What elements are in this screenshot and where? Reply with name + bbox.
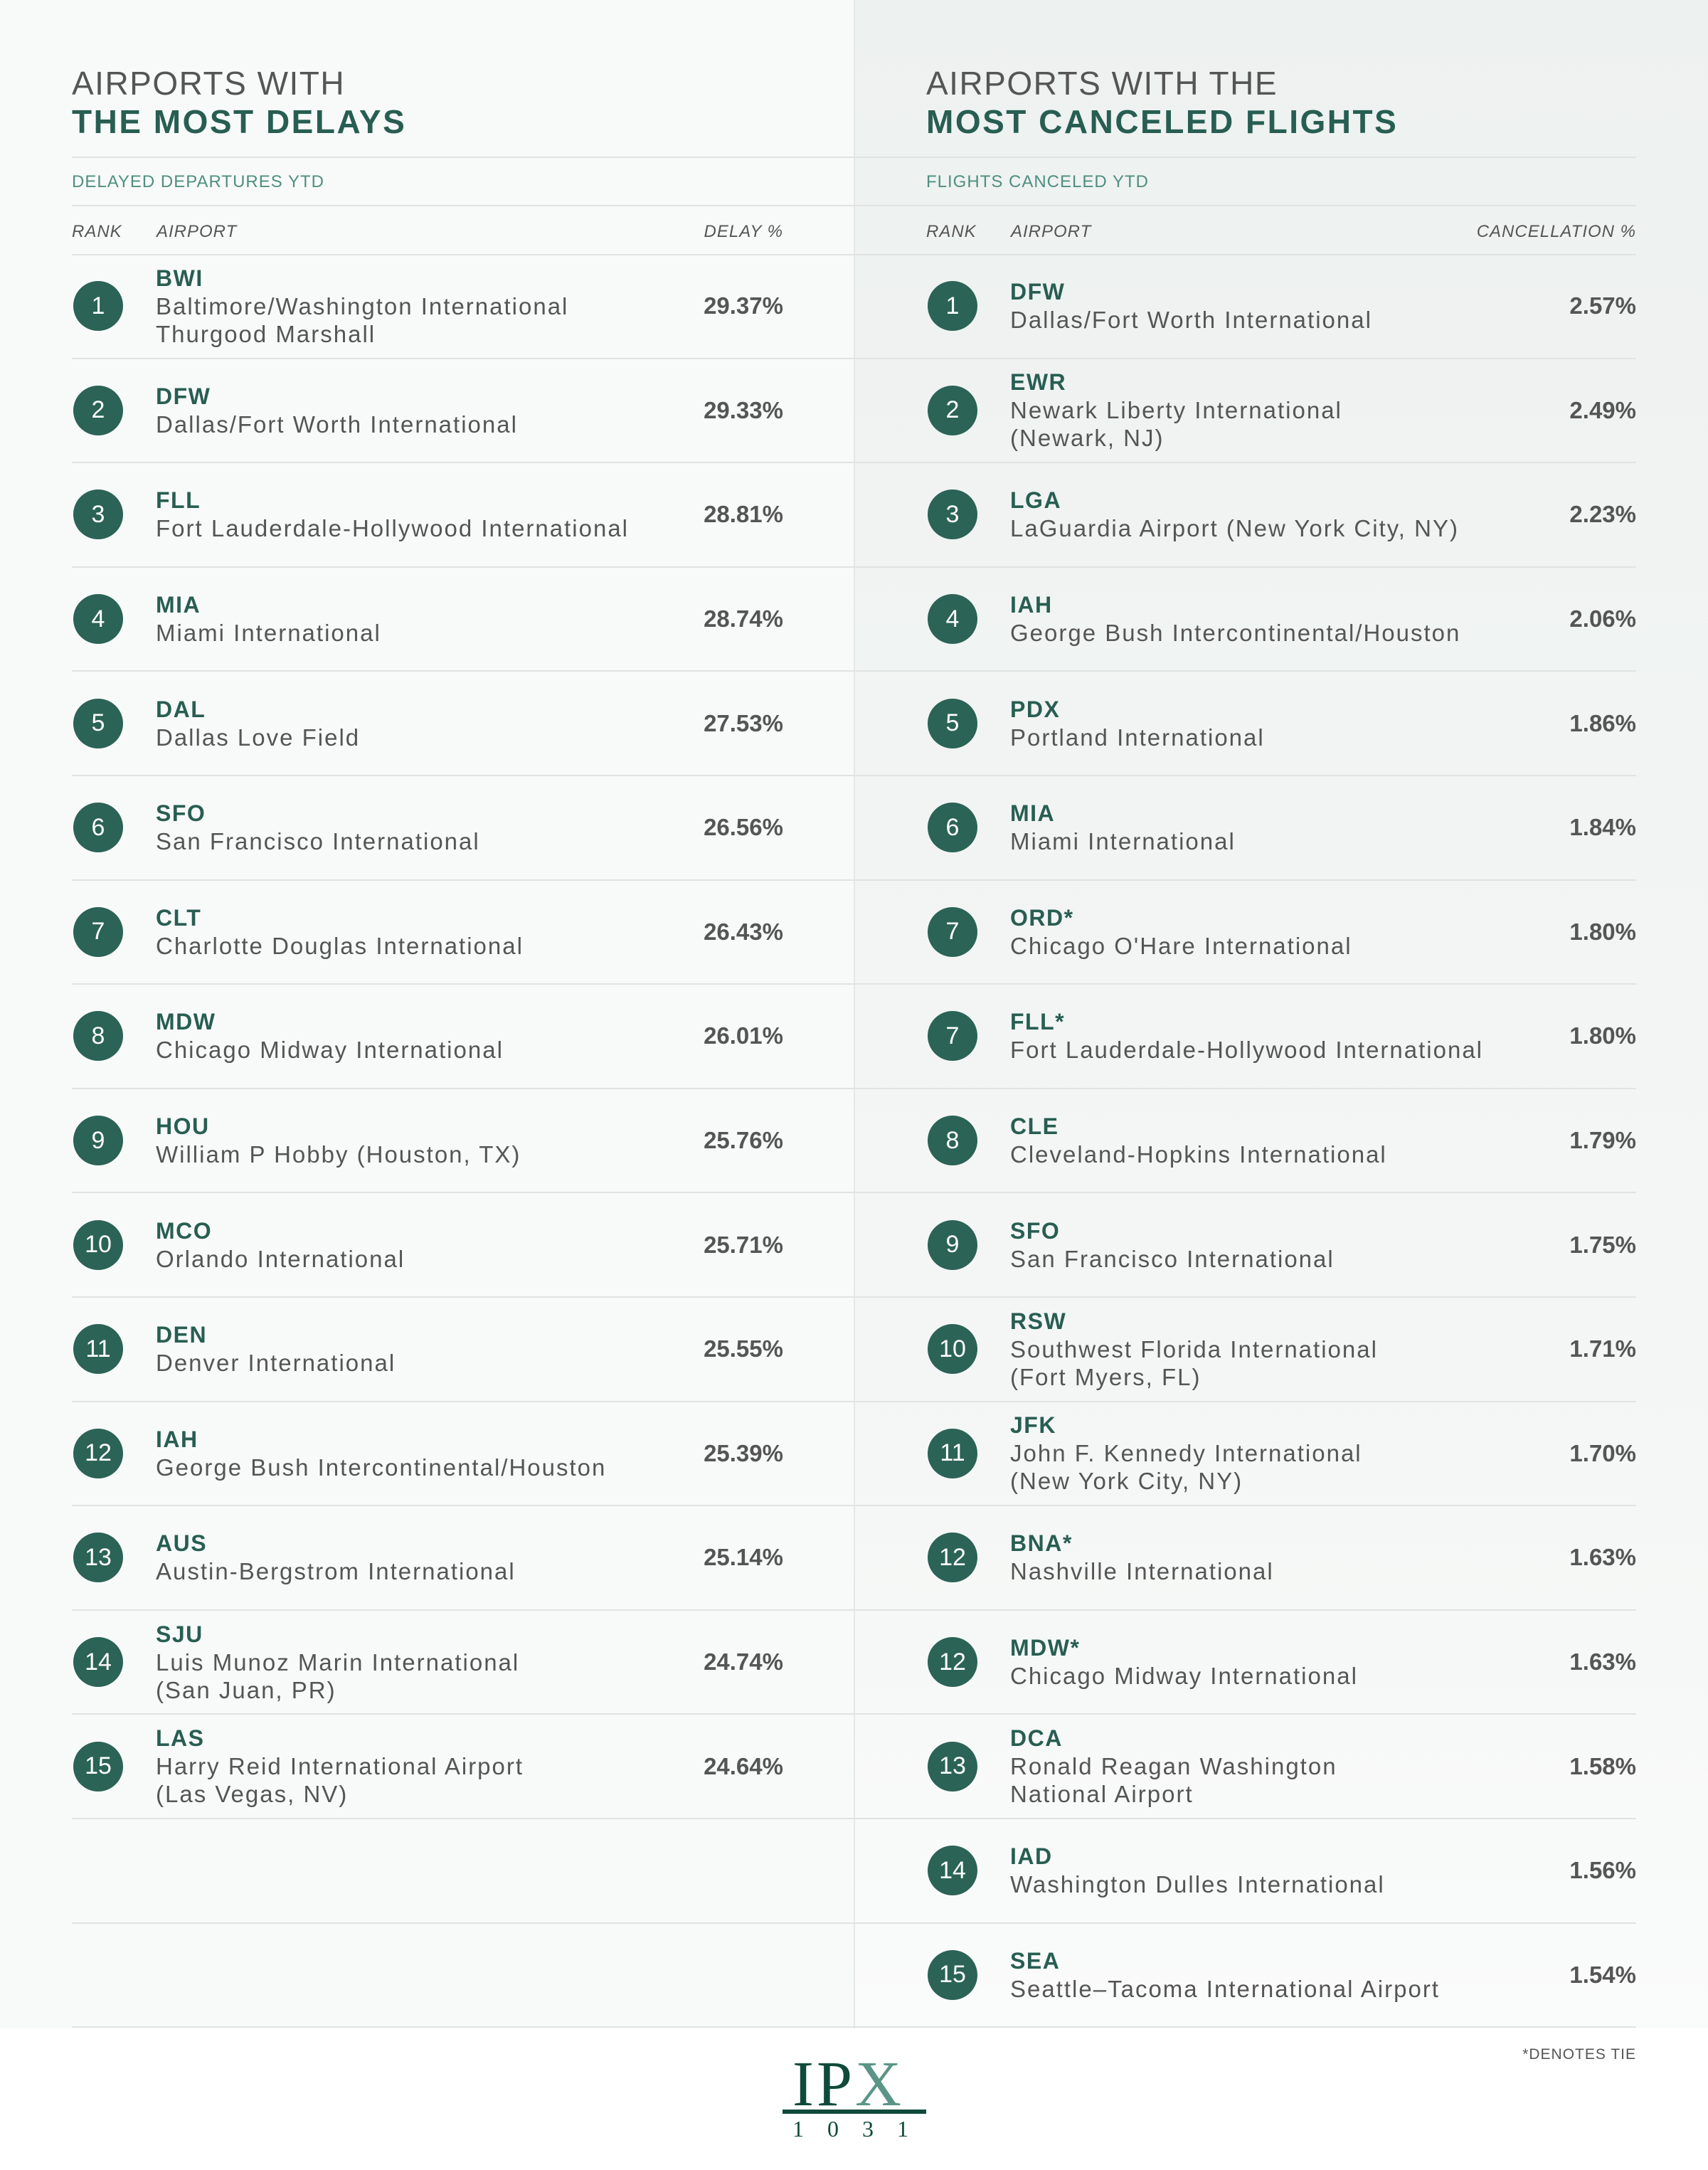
table: delays: 27.53% — [704, 710, 783, 736]
table: delays: 29.33% — [704, 397, 783, 423]
table: cancellations: 1.71% — [1569, 1335, 1636, 1362]
column headers: DELAY % — [704, 222, 783, 241]
table: delays: MDW — [156, 1009, 216, 1034]
table: delays: (San Juan, PR) — [156, 1677, 336, 1703]
table: delays: LAS — [156, 1725, 205, 1751]
table: delays: 28.74% — [704, 605, 783, 632]
table: delays: 26.56% — [704, 814, 783, 840]
table: delays: 1 — [92, 292, 105, 319]
table: delays: 12 — [85, 1439, 112, 1466]
table: cancellations: Nashville International — [1010, 1558, 1274, 1584]
table: cancellations: Miami International — [1010, 828, 1236, 854]
table: delays: DAL — [156, 697, 206, 722]
table: cancellations: 1.58% — [1569, 1753, 1636, 1779]
table: delays: 28.81% — [704, 501, 783, 527]
table: delays: 25.14% — [704, 1544, 783, 1570]
subtitle: DELAYED DEPARTURES YTD — [72, 172, 324, 191]
table: cancellations: Fort Lauderdale-Hollywood International — [1010, 1037, 1483, 1063]
table: delays: (Las Vegas, NV) — [156, 1781, 348, 1807]
table: cancellations: JFK — [1010, 1412, 1056, 1438]
table: delays: Miami International — [156, 620, 381, 646]
table: delays: 25.71% — [704, 1232, 783, 1258]
table: cancellations: 12 — [939, 1544, 966, 1571]
table: cancellations: National Airport — [1010, 1781, 1194, 1807]
table: delays: Dallas/Fort Worth International — [156, 411, 518, 438]
table: cancellations: IAD — [1010, 1843, 1053, 1869]
table: cancellations: IAH — [1010, 592, 1053, 618]
table: delays: 15 — [85, 1752, 112, 1779]
panel: most canceled — [855, 65, 1636, 2028]
table: cancellations: 1.70% — [1569, 1440, 1636, 1466]
column headers: CANCELLATION % — [1477, 222, 1636, 241]
table: delays: 4 — [92, 605, 105, 633]
table: cancellations: 1.75% — [1569, 1232, 1636, 1258]
table: cancellations: 1 — [946, 292, 959, 319]
table: cancellations: (Newark, NJ) — [1010, 425, 1165, 451]
table: cancellations: 1.63% — [1569, 1544, 1636, 1570]
subtitle: FLIGHTS CANCELED YTD — [926, 172, 1149, 191]
table: cancellations: Seattle–Tacoma International Airport — [1010, 1976, 1440, 2002]
table: delays: San Francisco International — [156, 828, 480, 854]
table: cancellations: Southwest Florida International — [1010, 1336, 1378, 1362]
table: cancellations: 6 — [946, 814, 959, 841]
table: cancellations: 7 — [946, 1022, 959, 1049]
table: delays: IAH — [156, 1427, 198, 1452]
table: cancellations: 1.56% — [1569, 1857, 1636, 1883]
table: delays: 29.37% — [704, 292, 783, 319]
table: delays: Baltimore/Washington International — [156, 293, 568, 319]
table: cancellations: Portland International — [1010, 724, 1265, 751]
table: delays: 14 — [85, 1648, 112, 1676]
table: cancellations: MDW* — [1010, 1635, 1080, 1661]
table: cancellations: DFW — [1010, 279, 1065, 305]
table: delays: Orlando International — [156, 1246, 405, 1272]
table: cancellations: 5 — [946, 709, 959, 736]
column headers: AIRPORT — [1011, 222, 1091, 241]
table: delays: CLT — [156, 905, 201, 931]
table: cancellations: CLE — [1010, 1113, 1059, 1139]
table: delays: 13 — [85, 1544, 112, 1571]
table: cancellations: Chicago O'Hare International — [1010, 933, 1352, 959]
table: delays: Harry Reid International Airport — [156, 1753, 524, 1779]
table: delays: 9 — [92, 1127, 105, 1154]
table: cancellations: RSW — [1010, 1308, 1066, 1334]
table: delays: SJU — [156, 1621, 203, 1647]
table: delays: 26.01% — [704, 1022, 783, 1049]
table: cancellations: Ronald Reagan Washington — [1010, 1753, 1337, 1779]
title: delays: AIRPORTS WITH — [72, 65, 345, 102]
table: delays: MIA — [156, 592, 201, 618]
table: delays: BWI — [156, 265, 203, 291]
table: delays: 5 — [92, 709, 105, 736]
table: cancellations: John F. Kennedy International — [1010, 1440, 1362, 1466]
logo: IPX 1031: IPX — [792, 2049, 904, 2119]
title: delays — [72, 65, 406, 140]
table: delays: 2 — [92, 396, 105, 423]
table: delays: 10 — [85, 1231, 112, 1258]
table: cancellations — [855, 279, 1636, 2028]
table: cancellations: 2.49% — [1569, 397, 1636, 423]
table: cancellations: 2.23% — [1569, 501, 1636, 527]
table: delays: Dallas Love Field — [156, 724, 360, 751]
table: cancellations: 12 — [939, 1648, 966, 1676]
table: cancellations: SEA — [1010, 1948, 1060, 1974]
table: delays: Thurgood Marshall — [156, 321, 376, 347]
table: cancellations: DCA — [1010, 1725, 1063, 1751]
column headers — [72, 222, 783, 241]
table: cancellations: Washington Dulles International — [1010, 1871, 1385, 1898]
table: delays: Denver International — [156, 1350, 396, 1376]
table: cancellations: Cleveland-Hopkins International — [1010, 1141, 1387, 1168]
table: delays: Fort Lauderdale-Hollywood International — [156, 515, 629, 541]
table: cancellations: 4 — [946, 605, 959, 633]
logo: IPX 1031: 1031 — [792, 2116, 932, 2142]
title: delays: THE MOST DELAYS — [72, 103, 406, 140]
table: delays: Chicago Midway International — [156, 1037, 504, 1063]
table: cancellations: 3 — [946, 501, 959, 528]
table: cancellations: 1.63% — [1569, 1648, 1636, 1675]
table: cancellations: PDX — [1010, 697, 1060, 722]
table: cancellations: SFO — [1010, 1218, 1060, 1244]
table: cancellations: 15 — [939, 1961, 966, 1988]
table: cancellations: LGA — [1010, 487, 1061, 513]
table: delays: 26.43% — [704, 919, 783, 945]
table: cancellations: 10 — [939, 1335, 966, 1362]
table: cancellations: Dallas/Fort Worth International — [1010, 307, 1372, 333]
logo: IPX 1031 — [783, 2049, 932, 2142]
table: delays: 24.74% — [704, 1648, 783, 1675]
table: cancellations: 7 — [946, 918, 959, 945]
table: cancellations: 14 — [939, 1857, 966, 1884]
table: delays: Luis Munoz Marin International — [156, 1649, 519, 1676]
table: delays: DFW — [156, 383, 211, 409]
title: canceled — [926, 65, 1398, 140]
footnote: *DENOTES TIE — [1522, 2046, 1636, 2063]
title: canceled: AIRPORTS WITH THE — [926, 65, 1278, 102]
column headers: RANK — [72, 222, 122, 241]
column headers — [926, 222, 1636, 241]
table: cancellations: 13 — [939, 1752, 966, 1779]
table: cancellations: 2.57% — [1569, 292, 1636, 319]
table: delays: William P Hobby (Houston, TX) — [156, 1141, 521, 1168]
table: cancellations: 1.79% — [1569, 1127, 1636, 1153]
table: cancellations: Chicago Midway International — [1010, 1663, 1358, 1689]
table: delays: 6 — [92, 814, 105, 841]
table: cancellations: 11 — [940, 1439, 965, 1466]
table: cancellations: 1.80% — [1569, 1022, 1636, 1049]
table: delays: AUS — [156, 1530, 207, 1556]
table: cancellations: ORD* — [1010, 905, 1074, 931]
table: cancellations: San Francisco International — [1010, 1246, 1335, 1272]
table: cancellations: 1.86% — [1569, 710, 1636, 736]
table: cancellations: (Fort Myers, FL) — [1010, 1364, 1201, 1390]
table: delays: 7 — [92, 918, 105, 945]
table: delays: MCO — [156, 1218, 212, 1244]
table: delays: 11 — [85, 1335, 111, 1362]
table: delays: Austin-Bergstrom International — [156, 1558, 516, 1584]
table: delays — [72, 265, 854, 2028]
table: delays: 25.76% — [704, 1127, 783, 1153]
table: delays: FLL — [156, 487, 201, 513]
column headers: AIRPORT — [157, 222, 237, 241]
table: delays: DEN — [156, 1322, 207, 1348]
table: cancellations: 9 — [946, 1231, 959, 1258]
panel: most delays — [72, 65, 854, 2028]
table: delays: 8 — [92, 1022, 105, 1049]
table: delays: 3 — [92, 501, 105, 528]
table: delays: 24.64% — [704, 1753, 783, 1779]
table: cancellations: 2.06% — [1569, 605, 1636, 632]
table: cancellations: (New York City, NY) — [1010, 1468, 1243, 1494]
table: cancellations: 2 — [946, 396, 959, 423]
table: delays: 25.39% — [704, 1440, 783, 1466]
table: cancellations: 1.54% — [1569, 1962, 1636, 1988]
table: cancellations: George Bush Intercontinental/Houston — [1010, 620, 1460, 646]
table: cancellations: 1.80% — [1569, 919, 1636, 945]
table: cancellations: LaGuardia Airport (New York City, NY) — [1010, 515, 1459, 541]
table: delays: HOU — [156, 1113, 210, 1139]
table: cancellations: Newark Liberty International — [1010, 397, 1342, 423]
table: cancellations: 1.84% — [1569, 814, 1636, 840]
table: cancellations: MIA — [1010, 800, 1055, 826]
table: delays: Charlotte Douglas International — [156, 933, 524, 959]
column headers: RANK — [926, 222, 977, 241]
table: cancellations: FLL* — [1010, 1009, 1065, 1034]
table: delays: 25.55% — [704, 1335, 783, 1362]
table: cancellations: BNA* — [1010, 1530, 1073, 1556]
table: delays: SFO — [156, 800, 206, 826]
title: canceled: MOST CANCELED FLIGHTS — [926, 103, 1398, 140]
table: cancellations: EWR — [1010, 369, 1066, 395]
table: delays: George Bush Intercontinental/Houston — [156, 1454, 606, 1481]
table: cancellations: 8 — [946, 1127, 959, 1154]
